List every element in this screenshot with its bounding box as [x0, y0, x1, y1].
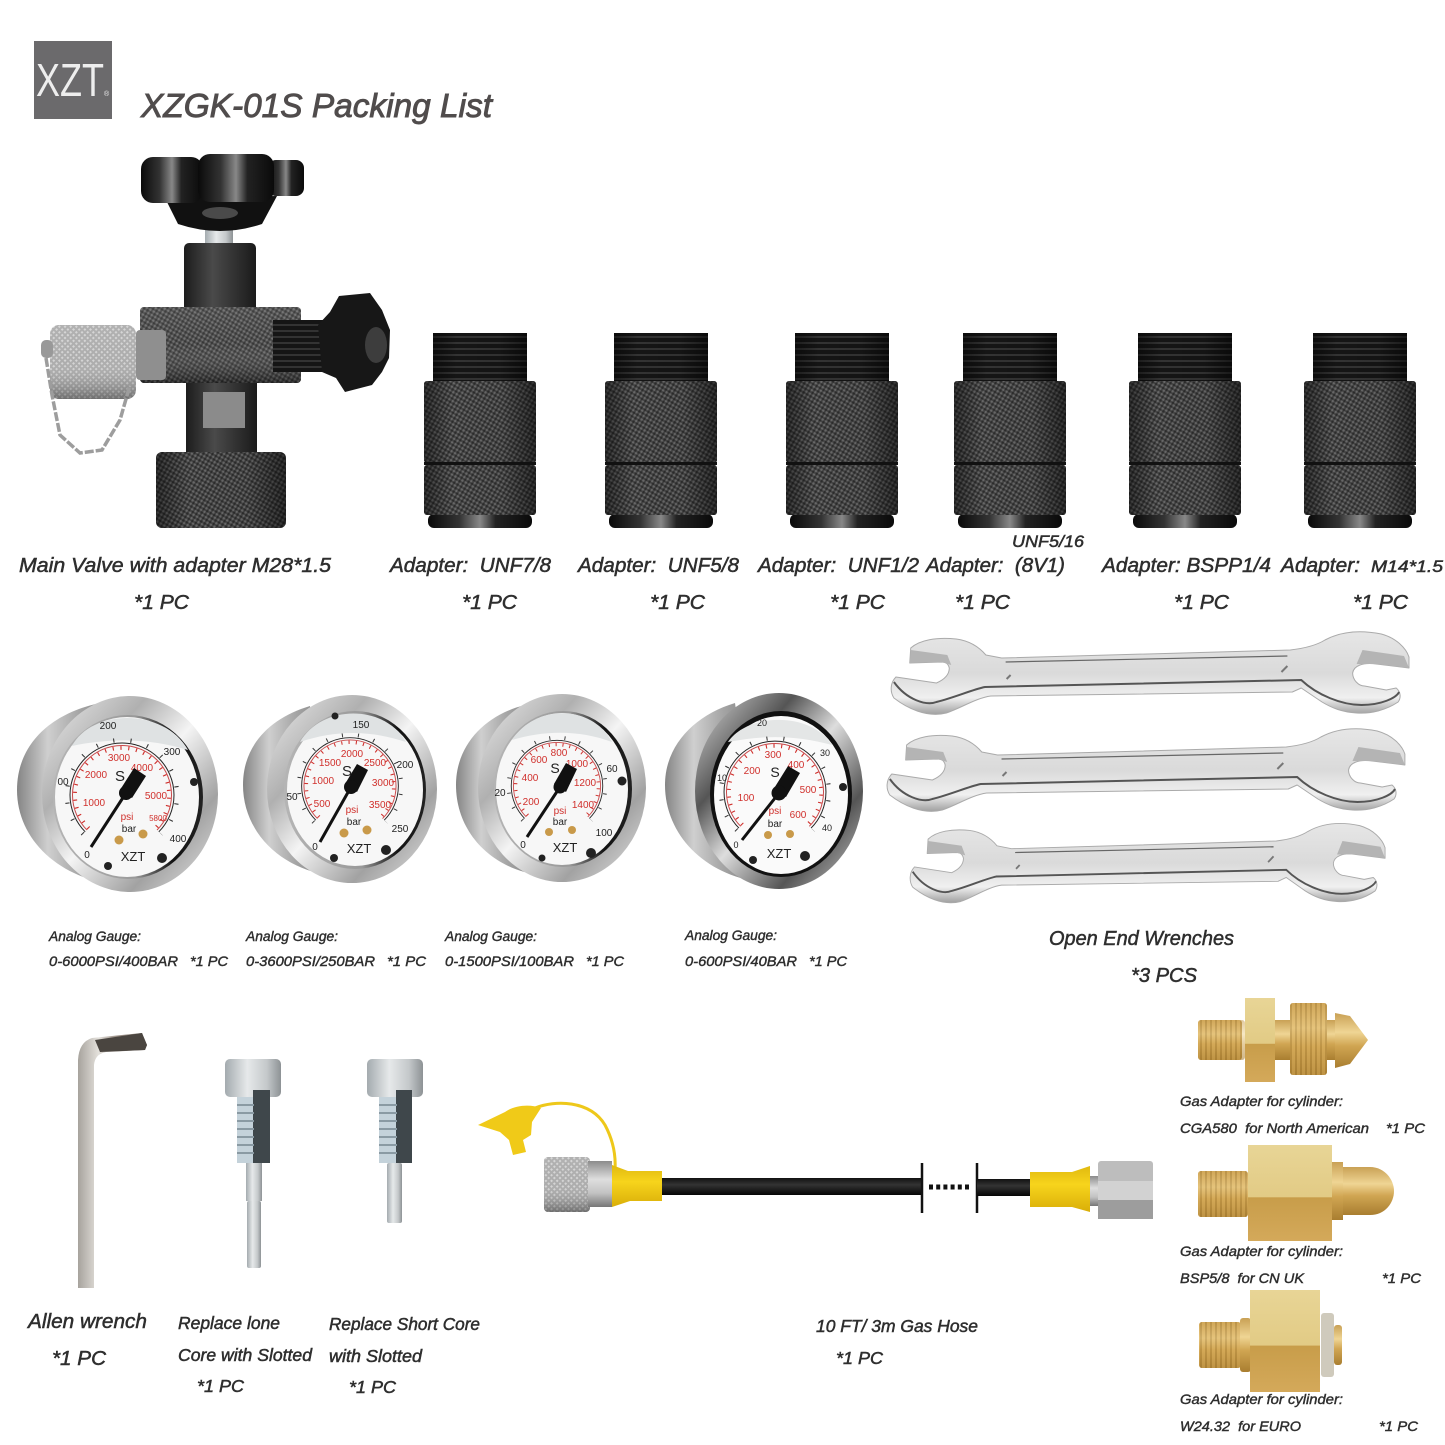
gauge: 0-1500 PSI: 20: [494, 788, 506, 799]
adapter label UNF7/8: Adapter: UNF7/8: [389, 555, 551, 577]
gauge: 0-1500 PSI: [456, 694, 646, 882]
gauge label 3600: *1 PC: [387, 953, 427, 969]
wrench name: Open End Wrenches: [1049, 928, 1234, 950]
gauge: 0-600 PSI: S: [770, 764, 780, 780]
gauge: 0-6000 PSI: 400: [170, 834, 187, 845]
short core label: [329, 1314, 480, 1397]
photo: brass adapter BSP5/8: [1198, 1145, 1394, 1241]
gauge label 600: *1 PC: [809, 953, 848, 969]
adapter UNF7/8: [424, 333, 536, 528]
gauge: 0-1500 PSI: 1000: [566, 759, 589, 770]
label: CGA580: CGA580 for North American: [1180, 1120, 1369, 1136]
gauge label 6000: 0-6000PSI/400BAR: [49, 953, 178, 969]
photo: long replacement core: [225, 1059, 281, 1268]
gauge: 0-3600 PSI: 1500: [319, 758, 342, 769]
photo: adapters row: [424, 333, 1416, 528]
adapter M14*1.5: [1304, 333, 1416, 528]
qty: *1 PC: [462, 592, 518, 614]
gauge: 0-6000 PSI: 5800: [149, 814, 167, 823]
black hose right: [977, 1179, 1031, 1196]
photo: 10 ft gas hose: [478, 1103, 1153, 1219]
gauge: 0-6000 PSI: 2000: [85, 770, 108, 781]
gauge: 0-600 PSI: 40: [822, 823, 832, 833]
label: CGA580: *1 PC: [1386, 1120, 1426, 1136]
gauge: 0-3600 PSI: 3000: [372, 778, 395, 789]
yellow sleeve right: [1030, 1166, 1090, 1212]
gauge: 0-600 PSI: 400: [788, 760, 805, 771]
hose name: 10 FT/ 3m Gas Hose: [816, 1316, 978, 1336]
qty: *1 PC: [955, 592, 1011, 614]
break bars: [922, 1163, 977, 1213]
gauge: 0-1500 PSI: 800: [551, 748, 568, 759]
gauge: 0-600 PSI: XZT: [767, 846, 791, 861]
adapter label BSPP1/4: Adapter: BSPP1/4: [1101, 555, 1271, 577]
gauge: 0-6000 PSI: 5000: [145, 791, 168, 802]
lower cylinder: [186, 380, 257, 462]
gauge: 0-3600 PSI: S: [342, 763, 352, 780]
labels: lower left: [27, 1311, 480, 1397]
gauge: 0-600 PSI: 100: [738, 793, 755, 804]
gauge: 0-6000 PSI: 4000: [131, 763, 154, 774]
square nub: [203, 392, 245, 428]
gauge: 0-3600 PSI: 150: [353, 720, 370, 731]
gauge label 3600: 0-3600PSI/250BAR: [246, 953, 375, 969]
short core label: *1 PC: [349, 1377, 396, 1397]
main valve label: Main Valve with adapter M28*1.5: [19, 555, 332, 577]
gauge: 0-1500 PSI: XZT: [553, 840, 577, 855]
gauge label 6000: [48, 928, 229, 969]
adapter BSPP1/4: [1129, 333, 1241, 528]
gauge: 0-600 PSI: 0: [733, 840, 739, 850]
side black knob: [318, 293, 390, 392]
photo: open end wrenches: [887, 632, 1409, 903]
adapter label UNF5/8: Adapter: UNF5/8: [577, 555, 739, 577]
gauge: 0-6000 PSI: bar: [122, 824, 137, 835]
gauge: 0-3600 PSI: 2500: [364, 758, 387, 769]
long core label: [178, 1313, 313, 1396]
gauge: 0-1500 PSI: bar: [553, 817, 568, 828]
gauge label 1500: [444, 928, 625, 969]
short core label: with Slotted: [329, 1346, 423, 1366]
gauge: 0-3600 PSI: 3500: [369, 800, 392, 811]
grey hex fitting: [136, 330, 166, 380]
gauge: 0-1500 PSI: 1400: [572, 800, 595, 811]
gauge label 6000: Analog Gauge:: [48, 928, 141, 944]
gauge: 0-6000 PSI: 3000: [108, 753, 131, 764]
break dots: [929, 1184, 972, 1190]
hose qty: *1 PC: [836, 1348, 883, 1368]
gauge: 0-1500 PSI: 1200: [574, 778, 597, 789]
label: wrenches: [1049, 928, 1234, 987]
long core label: Core with Slotted: [178, 1345, 313, 1365]
silver coupling: [41, 325, 136, 399]
label: CGA580: Gas Adapter for cylinder:: [1180, 1093, 1343, 1109]
gauge: 0-3600 PSI: 500: [314, 799, 331, 810]
labels: top row: [19, 532, 1444, 614]
adapter UNF1/2: [786, 333, 898, 528]
gauge: 0-1500 PSI: 400: [522, 773, 539, 784]
gauge: 0-600 PSI: [665, 693, 863, 889]
photo: main valve with adapter: [41, 154, 390, 528]
label: W24.32: Gas Adapter for cylinder:: [1180, 1391, 1343, 1407]
gauge: 0-600 PSI: bar: [768, 819, 783, 830]
gauge: 0-6000 PSI: 1000: [83, 798, 106, 809]
gauge label 1500: Analog Gauge:: [444, 928, 537, 944]
label: BSP5/8: BSP5/8 for CN UK: [1180, 1270, 1305, 1286]
upper cylinder: [184, 243, 256, 313]
logo: XZT: ®: [104, 90, 110, 98]
label: W24.32: [1180, 1391, 1419, 1434]
gauge: 0-1500 PSI: 60: [606, 764, 618, 775]
adapter size M14*1.5: M14*1.5: [1371, 557, 1444, 576]
allen wrench qty: *1 PC: [52, 1348, 107, 1370]
wrench 2: [887, 729, 1405, 811]
collar right: [1090, 1176, 1100, 1206]
adapter UNF5/8: [605, 333, 717, 528]
gauge: 0-1500 PSI: psi: [554, 806, 566, 817]
label: hose: [816, 1316, 978, 1368]
gauge label 600: 0-600PSI/40BAR: [685, 953, 797, 969]
logo: XZT: [34, 41, 112, 119]
title: XZGK-01S Packing List: [140, 87, 494, 124]
adapter label 8V1: Adapter: (8V1): [925, 555, 1065, 577]
gauge: 0-1500 PSI: 100: [596, 828, 613, 839]
gauge: 0-6000 PSI: [17, 696, 218, 892]
label: BSP5/8: [1180, 1243, 1422, 1286]
label: BSP5/8: Gas Adapter for cylinder:: [1180, 1243, 1343, 1259]
gauge: 0-6000 PSI: S: [115, 768, 125, 785]
side thread: [273, 320, 323, 372]
gauge: 0-600 PSI: 20: [757, 718, 767, 728]
gauge label 600: [684, 927, 848, 969]
label: CGA580: [1180, 1093, 1426, 1136]
qty: *1 PC: [650, 592, 706, 614]
gauge: 0-3600 PSI: 50: [286, 792, 298, 803]
gauge: 0-6000 PSI: XZT: [121, 849, 145, 864]
gauge: 0-3600 PSI: psi: [346, 805, 358, 816]
gauge: 0-3600 PSI: 2000: [341, 749, 364, 760]
chain: [46, 358, 130, 453]
top handwheel: [141, 154, 304, 231]
gauge label 3600: [245, 928, 427, 969]
gauge: 0-600 PSI: 200: [744, 766, 761, 777]
gauge: 0-600 PSI: 600: [790, 810, 807, 821]
gauge label 3600: Analog Gauge:: [245, 928, 338, 944]
allen wrench name: Allen wrench: [27, 1311, 147, 1333]
gauge: 0-6000 PSI: 00: [57, 777, 69, 788]
gauge: 0-1500 PSI: 0: [520, 840, 526, 851]
logo: XZT: XZT: [36, 54, 104, 106]
gauge label 600: Analog Gauge:: [684, 927, 777, 943]
gauge: 0-6000 PSI: 300: [164, 747, 181, 758]
gauge: 0-1500 PSI: 600: [531, 755, 548, 766]
label: BSP5/8: *1 PC: [1382, 1270, 1422, 1286]
photo: short replacement core: [367, 1059, 423, 1223]
adapter label M14: Adapter:: [1280, 555, 1360, 577]
wrench 3: [910, 823, 1385, 903]
wrench qty: *3 PCS: [1131, 965, 1198, 987]
gauge: 0-6000 PSI: 200: [100, 721, 117, 732]
photo: allen wrench: [78, 1033, 147, 1288]
label: W24.32: W24.32 for EURO: [1180, 1418, 1301, 1434]
gauge: 0-1500 PSI: S: [550, 760, 560, 776]
gauge: 0-600 PSI: psi: [769, 806, 781, 817]
gauge: 0-600 PSI: 300: [765, 750, 782, 761]
yellow dust cap: [478, 1103, 615, 1170]
long core label: Replace lone: [178, 1313, 280, 1333]
qty: *1 PC: [1174, 592, 1230, 614]
gauge: 0-3600 PSI: bar: [347, 817, 362, 828]
gauge: 0-600 PSI: 10: [717, 773, 727, 783]
gauge: 0-600 PSI: 30: [820, 748, 830, 758]
adapter UNF5/16: [954, 333, 1066, 528]
labels: gauges: [48, 927, 848, 969]
knurled nut: [544, 1157, 590, 1212]
long core label: *1 PC: [197, 1376, 244, 1396]
gauge: 0-6000 PSI: 0: [84, 850, 90, 861]
black hose left: [662, 1178, 922, 1195]
gauge: 0-3600 PSI: 200: [397, 760, 414, 771]
gauge: 0-6000 PSI: psi: [121, 812, 133, 823]
gauge: 0-3600 PSI: [243, 695, 437, 883]
collar: [588, 1161, 612, 1207]
gauge label 1500: *1 PC: [586, 953, 625, 969]
qty: *1 PC: [1353, 592, 1409, 614]
gauge: 0-3600 PSI: XZT: [347, 841, 371, 856]
photo: brass adapter CGA580: [1198, 998, 1368, 1082]
silver stem: [205, 226, 233, 248]
gauge: 0-1500 PSI: 200: [523, 797, 540, 808]
gauge: 0-3600 PSI: 0: [312, 842, 318, 853]
hex nut: [1098, 1161, 1153, 1219]
gauge: 0-3600 PSI: 1000: [312, 776, 335, 787]
gauge: 0-600 PSI: 500: [800, 785, 817, 796]
adapter label UNF1/2: Adapter: UNF1/2: [757, 555, 919, 577]
bottom knurled nut: [156, 452, 286, 528]
photo: brass adapter W24.32: [1199, 1290, 1342, 1392]
main valve qty: *1 PC: [134, 592, 190, 614]
label: W24.32: *1 PC: [1379, 1418, 1419, 1434]
wrench 1: [891, 632, 1409, 714]
gauge label 6000: *1 PC: [190, 953, 229, 969]
adapter label UNF5/16 upper line: UNF5/16: [1012, 532, 1085, 551]
gauge: 0-3600 PSI: 250: [392, 824, 409, 835]
knurled body block: [140, 307, 301, 383]
side knob hole: [365, 327, 387, 363]
short core label: Replace Short Core: [329, 1314, 480, 1334]
yellow sleeve left: [612, 1165, 662, 1207]
qty: *1 PC: [830, 592, 886, 614]
gauge label 1500: 0-1500PSI/100BAR: [445, 953, 574, 969]
